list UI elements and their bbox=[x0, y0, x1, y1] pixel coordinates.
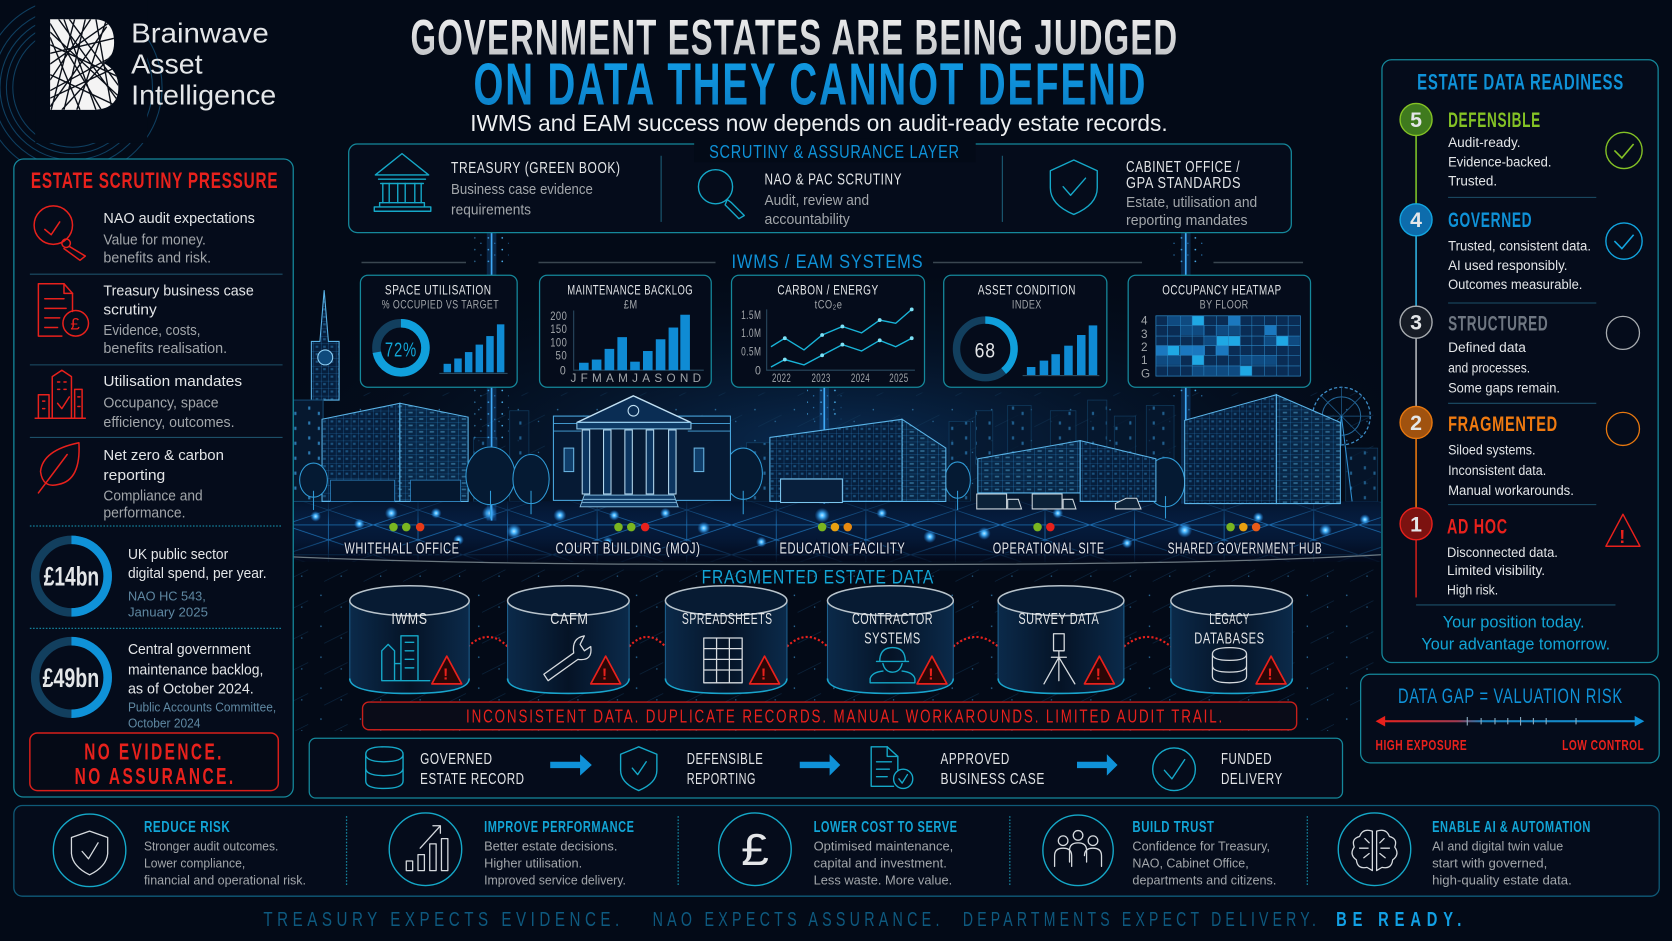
risk scale arrow bbox=[1376, 716, 1644, 727]
icon: shield bbox=[621, 747, 657, 791]
ladder connector bbox=[1415, 135, 1417, 597]
KPI: carbon energy line chart: 2025 bbox=[889, 372, 909, 385]
benefit: build trust bbox=[1132, 819, 1276, 887]
icon: audit magnifier bbox=[34, 206, 85, 260]
beams bbox=[475, 233, 1203, 521]
stat: £14bn ring: £14bn bbox=[44, 562, 99, 592]
level 2 fragmented bbox=[1400, 406, 1639, 498]
level 2 fragmented: Inconsistent data. bbox=[1448, 462, 1546, 478]
vehicles bbox=[977, 494, 1141, 509]
utilisation text: Occupancy, space bbox=[103, 396, 219, 412]
benefit: enable AI: high-quality estate data. bbox=[1432, 872, 1572, 887]
logo: Brainwave bbox=[131, 18, 269, 49]
label: funded delivery: DELIVERY bbox=[1221, 771, 1283, 788]
benefit: improve performance: Higher utilisation. bbox=[484, 855, 582, 870]
KPI: occupancy heatmap: OCCUPANCY HEATMAP bbox=[1162, 281, 1282, 297]
net zero text bbox=[103, 447, 224, 521]
data store: IWMS: ! bbox=[443, 667, 448, 684]
panel: benefits strip bbox=[14, 806, 1659, 896]
stat text: backlog bbox=[128, 642, 276, 731]
treasury case text: scrutiny bbox=[103, 302, 157, 319]
label: governed estate record bbox=[420, 751, 525, 788]
KPI: occupancy heatmap: 1 bbox=[1141, 354, 1148, 367]
level 5 defensible: Evidence-backed. bbox=[1448, 153, 1552, 169]
data store: IWMS: IWMS bbox=[391, 611, 428, 628]
stat: £49bn ring: £49bn bbox=[43, 663, 99, 693]
data store: IWMS bbox=[350, 586, 469, 693]
KPI: carbon energy line chart: 2022 bbox=[772, 372, 791, 385]
icon: magnifier bbox=[698, 170, 744, 219]
stat text: backlog: Central government bbox=[128, 642, 251, 658]
net zero text: Compliance and bbox=[103, 488, 203, 504]
data store: legacy databases: ! bbox=[1267, 667, 1273, 684]
building: education facility bbox=[770, 419, 946, 503]
KPI: occupancy heatmap: G bbox=[1141, 368, 1151, 381]
NAO audit text bbox=[103, 210, 255, 266]
alert bar: INCONSISTENT DATA. DUPLICATE RECORDS. MANUAL WORKAROUNDS. LIMITED AUDIT TRAIL. bbox=[466, 706, 1224, 726]
building: operational site bbox=[978, 441, 1156, 501]
KPI: carbon energy line chart: 0 bbox=[755, 364, 761, 377]
site labels: EDUCATION FACILITY bbox=[779, 541, 905, 558]
KPI: maintenance backlog: 100 bbox=[550, 337, 567, 350]
level 4 governed: 4 bbox=[1410, 208, 1422, 232]
KPI: maintenance backlog: JFMAMJASOND bbox=[570, 372, 702, 385]
stat: £49bn ring bbox=[35, 641, 108, 714]
stat text: digital spend: UK public sector bbox=[128, 547, 228, 563]
icon: business case document bbox=[38, 284, 89, 336]
benefit: lower cost: LOWER COST TO SERVE bbox=[814, 819, 958, 836]
KPI: maintenance backlog: 200 bbox=[550, 310, 567, 323]
icon: lower cost pound bbox=[719, 813, 791, 886]
closing tagline bbox=[263, 909, 1467, 931]
level 1 ad hoc: Disconnected data. bbox=[1447, 544, 1558, 560]
stat text: digital spend: digital spend, per year. bbox=[128, 566, 267, 582]
KPI: space utilisation: 72% bbox=[385, 339, 417, 361]
section heading: IWMS / EAM systems: IWMS / EAM SYSTEMS bbox=[732, 252, 923, 273]
benefit: reduce risk: Lower compliance, bbox=[144, 855, 245, 870]
cabinet office text: reporting mandates bbox=[1126, 213, 1248, 229]
net zero text: reporting bbox=[103, 467, 165, 484]
label: funded delivery bbox=[1221, 751, 1283, 788]
building: Big Ben tower bbox=[293, 290, 339, 501]
icon: database bbox=[366, 747, 403, 788]
level 3 structured: STRUCTURED bbox=[1448, 312, 1548, 336]
building: Whitehall office bbox=[322, 403, 468, 501]
heading: fragmented estate data: FRAGMENTED ESTATE DATA bbox=[702, 568, 934, 589]
treasury case text: Evidence, costs, bbox=[103, 323, 200, 339]
benefit: build trust: NAO, Cabinet Office, bbox=[1132, 855, 1249, 870]
closing statement bbox=[1421, 612, 1610, 654]
traffic light indicators bbox=[389, 523, 1260, 531]
benefit: lower cost: Less waste. More value. bbox=[814, 872, 952, 887]
KPI: carbon energy line chart bbox=[732, 275, 925, 387]
icon: people bbox=[1043, 815, 1113, 886]
KPI: occupancy heatmap bbox=[1128, 275, 1311, 387]
KPI: carbon energy line chart: 0.5M bbox=[741, 345, 761, 358]
utilisation text bbox=[103, 373, 242, 431]
data store: spreadsheets bbox=[665, 586, 787, 693]
stat text: backlog: October 2024 bbox=[128, 716, 200, 731]
site labels: SHARED GOVERNMENT HUB bbox=[1168, 541, 1322, 558]
icon: leaf bbox=[38, 443, 79, 493]
benefit: enable AI: ENABLE AI & AUTOMATION bbox=[1432, 819, 1591, 836]
KPI: carbon energy line chart: tCO₂e bbox=[815, 297, 842, 311]
site labels: COURT BUILDING (MOJ) bbox=[556, 541, 701, 558]
benefit: build trust: BUILD TRUST bbox=[1132, 819, 1215, 836]
closing tagline: BE READY. bbox=[1336, 909, 1467, 931]
closing statement: Your advantage tomorrow. bbox=[1421, 635, 1610, 654]
label: funded delivery: FUNDED bbox=[1221, 751, 1272, 768]
benefit: improve performance: Improved service delivery. bbox=[484, 872, 626, 887]
title bbox=[411, 9, 1178, 118]
stat text: backlog: maintenance backlog, bbox=[128, 662, 263, 678]
level 4 governed bbox=[1400, 204, 1642, 292]
KPI: carbon energy line chart: CARBON / ENERGY bbox=[777, 281, 879, 297]
panel heading: SCRUTINY & ASSURANCE LAYER bbox=[709, 142, 960, 162]
KPI: occupancy heatmap: BY FLOOR bbox=[1200, 297, 1249, 311]
callout: no evidence no assurance bbox=[30, 733, 278, 791]
benefit: improve performance: Better estate decisions. bbox=[484, 838, 617, 853]
icon: shield bbox=[1050, 160, 1097, 214]
level 3 structured: 3 bbox=[1410, 311, 1422, 335]
title: ON DATA THEY CANNOT DEFEND bbox=[473, 51, 1147, 118]
KPI: carbon energy line chart: 1.5M bbox=[741, 309, 761, 322]
net zero text: Net zero & carbon bbox=[103, 447, 224, 464]
level 5 defensible: Audit-ready. bbox=[1448, 134, 1521, 150]
icon: business case document: £ bbox=[70, 315, 80, 334]
KPI: occupancy heatmap: 2 bbox=[1141, 341, 1148, 354]
level 3 structured: and processes. bbox=[1448, 359, 1530, 375]
KPI: asset condition index: 68 bbox=[975, 338, 996, 362]
data store: contractor systems: CONTRACTOR bbox=[852, 611, 933, 628]
icon: improve performance chart bbox=[389, 813, 462, 886]
trees bbox=[300, 447, 1185, 519]
KPI: space utilisation: % OCCUPIED VS TARGET bbox=[382, 297, 499, 311]
city illustration backdrop bbox=[293, 251, 1381, 731]
level 1 ad hoc bbox=[1400, 508, 1640, 597]
closing tagline: DEPARTMENTS EXPECT DELIVERY. bbox=[963, 909, 1320, 931]
KPI: space utilisation bbox=[360, 275, 517, 387]
stat text: digital spend bbox=[128, 547, 267, 620]
data store: survey data bbox=[998, 586, 1124, 693]
benefit: reduce risk bbox=[144, 819, 306, 887]
stat text: digital spend: January 2025 bbox=[128, 605, 208, 620]
data store: legacy databases: LEGACY bbox=[1209, 611, 1250, 628]
title: GOVERNMENT ESTATES ARE BEING JUDGED bbox=[411, 9, 1178, 65]
data store: CAFM: CAFM bbox=[550, 611, 589, 628]
KPI: maintenance backlog: MAINTENANCE BACKLOG bbox=[567, 281, 693, 297]
NAO text bbox=[765, 172, 902, 228]
level 4 governed: AI used responsibly. bbox=[1448, 257, 1568, 273]
site labels bbox=[344, 541, 1322, 558]
net zero text: performance. bbox=[103, 505, 186, 521]
label: approved business case: BUSINESS CASE bbox=[940, 771, 1045, 788]
benefit: lower cost: capital and investment. bbox=[814, 855, 947, 870]
data store: spreadsheets: ! bbox=[761, 667, 766, 684]
level 2 fragmented: Siloed systems. bbox=[1448, 441, 1536, 457]
level 2 fragmented: 2 bbox=[1410, 411, 1422, 435]
arrow bbox=[800, 754, 840, 776]
arrow bbox=[550, 754, 592, 776]
treasury text: TREASURY (GREEN BOOK) bbox=[451, 160, 621, 177]
arrow bbox=[1077, 754, 1118, 776]
closing statement: Your position today. bbox=[1443, 612, 1585, 631]
stat: £14bn ring bbox=[35, 540, 108, 612]
stat text: backlog: as of October 2024. bbox=[128, 681, 254, 697]
red broken links between data stores bbox=[468, 637, 1171, 647]
benefit: enable AI bbox=[1432, 819, 1591, 887]
KPI: carbon energy line chart: 2023 bbox=[811, 372, 831, 385]
panel: flow from record to delivery bbox=[309, 738, 1343, 798]
treasury text bbox=[451, 160, 621, 218]
treasury case text: benefits realisation. bbox=[103, 341, 227, 357]
cabinet office text bbox=[1126, 159, 1257, 229]
label: defensible reporting: DEFENSIBLE bbox=[687, 751, 763, 768]
data store: survey data: ! bbox=[1096, 667, 1101, 684]
building: shared government hub bbox=[1185, 387, 1370, 504]
utilisation text: Utilisation mandates bbox=[103, 373, 242, 390]
KPI: carbon energy line chart: 2024 bbox=[851, 372, 870, 385]
label: defensible reporting bbox=[687, 751, 763, 788]
icon: check circle bbox=[1153, 748, 1195, 791]
logo: Intelligence bbox=[131, 80, 276, 111]
benefit: reduce risk: Stronger audit outcomes. bbox=[144, 838, 278, 853]
data store: legacy databases bbox=[1171, 586, 1292, 693]
icon: reduce risk shield bbox=[53, 814, 126, 887]
benefit: reduce risk: REDUCE RISK bbox=[144, 819, 230, 836]
level 3 structured: Some gaps remain. bbox=[1448, 380, 1560, 396]
level 2 fragmented: Manual workarounds. bbox=[1448, 482, 1574, 498]
KPI: maintenance backlog bbox=[540, 275, 711, 387]
site labels: WHITEHALL OFFICE bbox=[344, 541, 460, 558]
benefit: build trust: Confidence for Treasury, bbox=[1132, 838, 1270, 853]
data store: contractor systems bbox=[827, 586, 953, 693]
level 1 ad hoc: High risk. bbox=[1447, 581, 1498, 597]
level 2 fragmented: FRAGMENTED bbox=[1448, 412, 1558, 436]
data store: spreadsheets: SPREADSHEETS bbox=[682, 611, 773, 628]
closing tagline: NAO EXPECTS ASSURANCE. bbox=[653, 909, 944, 931]
cabinet office text: CABINET OFFICE / bbox=[1126, 159, 1240, 176]
label: approved business case bbox=[940, 751, 1045, 788]
level 5 defensible: DEFENSIBLE bbox=[1448, 108, 1541, 132]
benefit: build trust: departments and citizens. bbox=[1132, 872, 1276, 887]
KPI: occupancy heatmap: 4 bbox=[1141, 314, 1148, 327]
NAO text: Audit, review and bbox=[765, 193, 869, 209]
callout: no evidence no assurance: NO ASSURANCE. bbox=[75, 763, 236, 789]
panel: estate scrutiny pressure bbox=[14, 159, 293, 797]
level 4 governed: Outcomes measurable. bbox=[1448, 276, 1582, 292]
data store: legacy databases: DATABASES bbox=[1194, 630, 1265, 647]
KPI: maintenance backlog: £M bbox=[624, 297, 638, 311]
utilisation text: efficiency, outcomes. bbox=[103, 415, 235, 431]
data store: CAFM bbox=[508, 586, 629, 693]
callout: no evidence no assurance: NO EVIDENCE. bbox=[84, 739, 224, 765]
treasury case text bbox=[103, 283, 254, 357]
building: court building bbox=[553, 396, 730, 507]
level 3 structured bbox=[1400, 306, 1639, 396]
benefit: reduce risk: financial and operational risk. bbox=[144, 872, 306, 887]
level 1 ad hoc: ! bbox=[1619, 527, 1625, 547]
site labels: OPERATIONAL SITE bbox=[993, 541, 1105, 558]
benefit: improve performance bbox=[484, 819, 634, 887]
closing tagline: TREASURY EXPECTS EVIDENCE. bbox=[263, 909, 624, 931]
data store: contractor systems: ! bbox=[928, 667, 934, 684]
KPI: maintenance backlog: 150 bbox=[550, 323, 567, 336]
level 4 governed: GOVERNED bbox=[1448, 208, 1532, 232]
KPI: occupancy heatmap: 3 bbox=[1141, 328, 1148, 341]
panel: data gap valuation risk: HIGH EXPOSURE bbox=[1376, 738, 1467, 754]
NAO audit text: NAO audit expectations bbox=[103, 210, 255, 227]
benefit: enable AI: AI and digital twin value bbox=[1432, 838, 1563, 853]
treasury text: Business case evidence bbox=[451, 182, 593, 198]
benefit: lower cost: Optimised maintenance, bbox=[814, 838, 953, 853]
level 3 structured: Defined data bbox=[1448, 339, 1526, 355]
panel: estate data readiness bbox=[1382, 60, 1658, 663]
benefit: improve performance: IMPROVE PERFORMANCE bbox=[484, 819, 634, 836]
stat text: digital spend: NAO HC 543, bbox=[128, 589, 206, 604]
level 5 defensible bbox=[1400, 103, 1642, 189]
NAO audit text: Value for money. bbox=[103, 232, 206, 248]
data store: contractor systems: SYSTEMS bbox=[864, 630, 921, 647]
icon: approved document bbox=[871, 747, 913, 788]
KPI: maintenance backlog: 50 bbox=[556, 350, 567, 363]
cabinet office text: Estate, utilisation and bbox=[1126, 195, 1257, 211]
cabinet office text: GPA STANDARDS bbox=[1126, 175, 1241, 192]
NAO text: accountability bbox=[765, 212, 851, 228]
KPI: asset condition index bbox=[944, 275, 1107, 387]
level 5 defensible: 5 bbox=[1410, 108, 1422, 132]
stat text: backlog: Public Accounts Committee, bbox=[128, 700, 276, 715]
logo: Asset bbox=[131, 49, 203, 80]
NAO audit text: benefits and risk. bbox=[103, 250, 211, 266]
icon: utilisation buildings bbox=[35, 370, 85, 418]
icon: lower cost pound: £ bbox=[741, 825, 769, 875]
treasury case text: Treasury business case bbox=[103, 283, 254, 300]
benefit: enable AI: start with governed, bbox=[1432, 855, 1547, 870]
panel: data gap valuation risk bbox=[1361, 674, 1659, 763]
KPI: asset condition index: INDEX bbox=[1012, 297, 1042, 311]
panel: scrutiny and assurance layer bbox=[349, 139, 1291, 233]
KPI: space utilisation: SPACE UTILISATION bbox=[385, 281, 492, 297]
icon: brain bbox=[1338, 813, 1411, 886]
subtitle: IWMS and EAM success now depends on audit-ready estate records. bbox=[470, 110, 1168, 136]
icon: treasury building bbox=[374, 154, 431, 211]
level 1 ad hoc: 1 bbox=[1410, 512, 1422, 536]
treasury text: requirements bbox=[451, 202, 531, 218]
level 1 ad hoc: Limited visibility. bbox=[1447, 562, 1545, 578]
heading: ESTATE SCRUTINY PRESSURE bbox=[31, 168, 278, 193]
KPI: asset condition index: ASSET CONDITION bbox=[978, 281, 1076, 297]
NAO text: NAO & PAC SCRUTINY bbox=[765, 172, 902, 189]
KPI: carbon energy line chart: 1.0M bbox=[741, 327, 761, 340]
benefit: lower cost bbox=[814, 819, 958, 887]
label: defensible reporting: REPORTING bbox=[687, 771, 756, 788]
data store: survey data: SURVEY DATA bbox=[1018, 611, 1099, 628]
level 5 defensible: Trusted. bbox=[1448, 173, 1497, 189]
label: governed estate record: GOVERNED bbox=[420, 751, 493, 768]
data store: CAFM: ! bbox=[602, 667, 607, 684]
logo bbox=[0, 6, 275, 160]
level 4 governed: Trusted, consistent data. bbox=[1448, 238, 1591, 254]
alert bar bbox=[363, 702, 1297, 730]
label: approved business case: APPROVED bbox=[940, 751, 1010, 768]
label: governed estate record: ESTATE RECORD bbox=[420, 771, 525, 788]
level 1 ad hoc: AD HOC bbox=[1447, 514, 1508, 538]
KPI: maintenance backlog: 0 bbox=[560, 364, 566, 377]
